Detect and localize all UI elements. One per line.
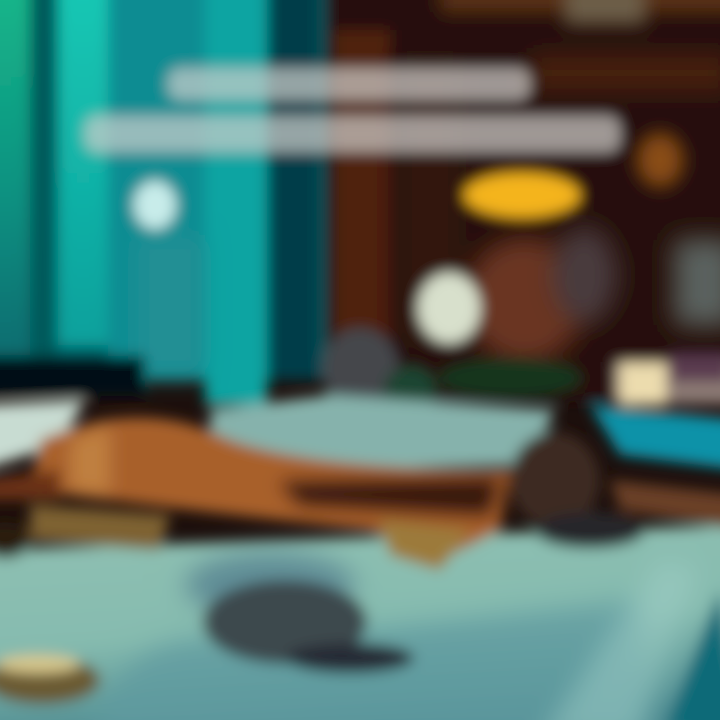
panel: dark ledge: [0, 356, 145, 396]
icon: plate: [0, 656, 100, 704]
icon: white flower: [418, 273, 480, 343]
panel: teal book stack: [590, 355, 720, 530]
icon: grey bowl: [185, 553, 414, 673]
icon: pale glow: [134, 181, 176, 229]
icon: yellow lamp: [464, 173, 580, 217]
icon: dark object on scroll: [0, 432, 645, 558]
icon: grey vase and plant: [322, 328, 582, 414]
title: [85, 68, 620, 152]
panel: wooden bookcase: [325, 0, 720, 400]
panel: table surface: [0, 525, 720, 720]
panel: orange scroll: [0, 418, 510, 570]
panel: teal curtain: [0, 0, 325, 405]
panel: pale paper: [0, 395, 555, 470]
